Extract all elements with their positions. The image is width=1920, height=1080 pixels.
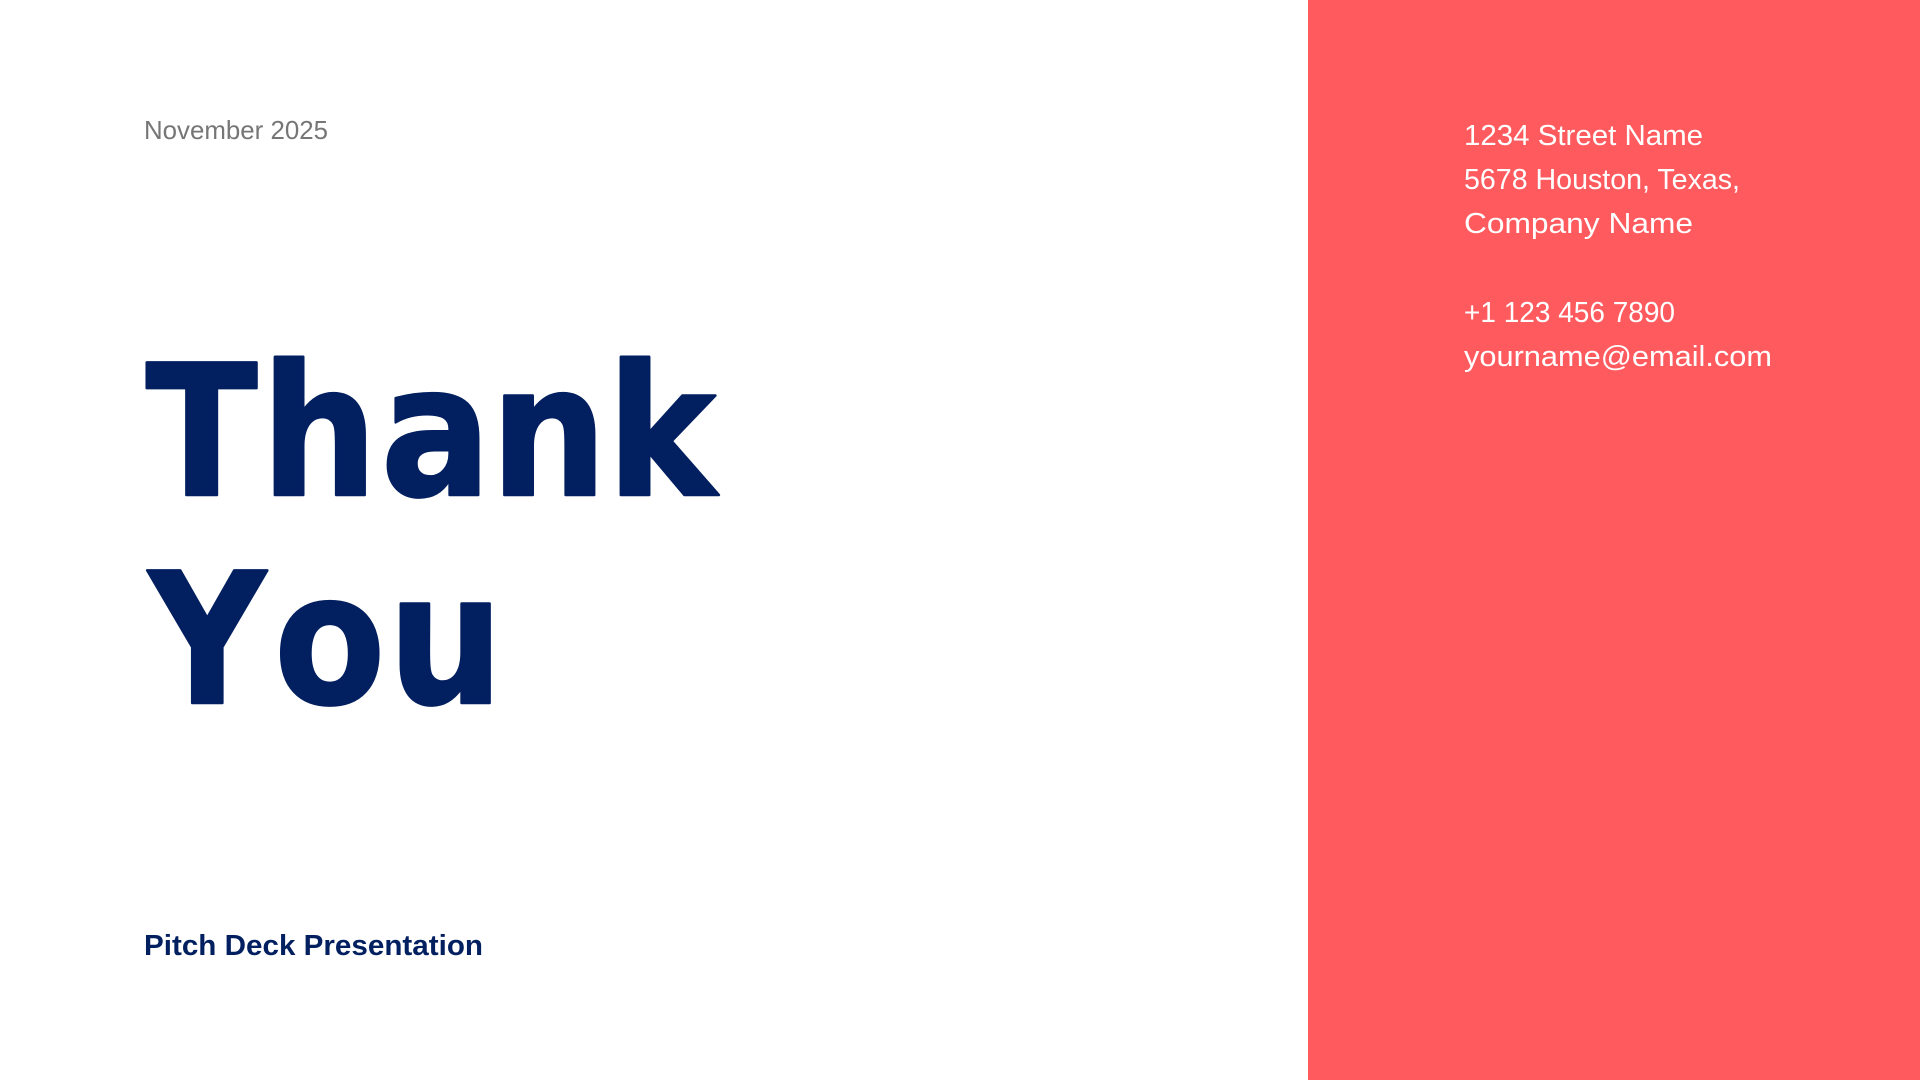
phone number: +1 123 456 7890 — [1464, 297, 1675, 329]
subtitle: Pitch Deck Presentation — [144, 930, 483, 962]
title line: Thank: Thank — [146, 326, 720, 538]
date: November 2025 — [144, 115, 328, 145]
address line 1: 1234 Street Name — [1464, 120, 1703, 152]
title line: You: You — [147, 534, 503, 746]
company name: Company Name — [1464, 208, 1693, 240]
address line 2: 5678 Houston, Texas, — [1464, 164, 1740, 196]
title — [146, 326, 720, 746]
email address: yourname@email.com — [1464, 341, 1772, 373]
contact details — [1464, 120, 1772, 373]
panel: contact background — [1308, 0, 1920, 1080]
